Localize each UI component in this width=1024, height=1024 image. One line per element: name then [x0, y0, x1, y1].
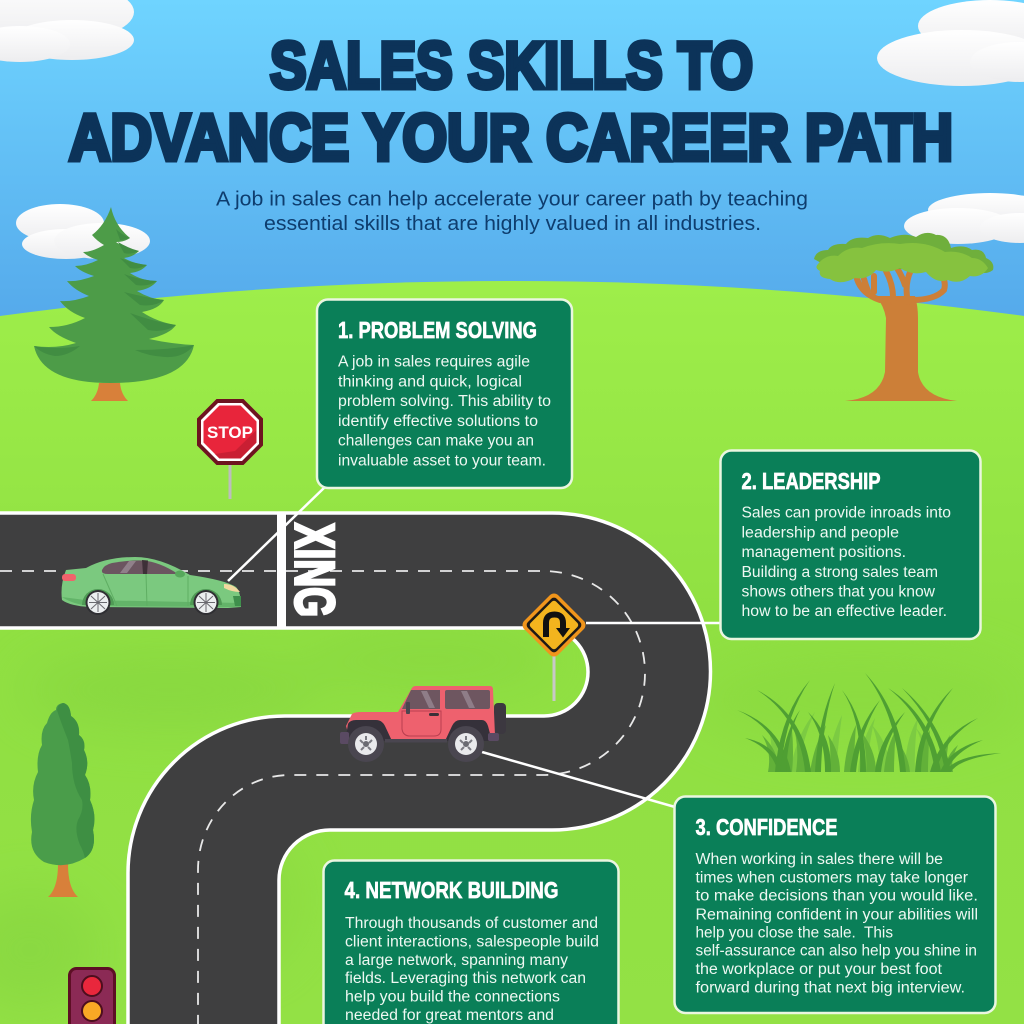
panel: 2. leadership — [720, 450, 980, 639]
XING road marking: XING — [284, 523, 346, 617]
icon: small cypress tree — [31, 703, 94, 897]
body text: Building a strong sales team — [742, 564, 938, 581]
body text: self-assurance can also help you shine in — [696, 943, 977, 960]
cloud: top right — [877, 0, 1024, 86]
body text: forward during that next big interview. — [696, 979, 965, 996]
panel: 4. network building — [324, 860, 618, 1024]
heading: 1. PROBLEM SOLVING — [338, 317, 537, 343]
body text: identify effective solutions to — [338, 413, 538, 430]
body text: help you close the sale. This — [696, 925, 893, 942]
body text: a large network, spanning many — [345, 952, 568, 969]
cloud: middle left — [16, 204, 150, 259]
subtitle — [216, 188, 808, 235]
road — [0, 513, 710, 1024]
heading: 2. LEADERSHIP — [742, 468, 880, 494]
body text: to make decisions than you would like. — [696, 888, 978, 905]
body text — [742, 505, 951, 620]
body text — [696, 851, 978, 996]
subtitle: A job in sales can help accelerate your career path by teaching — [216, 188, 808, 210]
body text: challenges can make you an — [338, 433, 534, 450]
body text: invaluable asset to your team. — [338, 452, 546, 470]
body text: needed for great mentors and — [345, 1007, 554, 1024]
title: SALES SKILLS TO — [270, 28, 753, 102]
body text: When working in sales there will be — [696, 851, 943, 868]
body text: Sales can provide inroads into — [742, 505, 951, 522]
panel: 3. confidence — [674, 796, 996, 1013]
icon: u-turn sign — [520, 591, 588, 701]
icon: pine tree — [34, 207, 194, 401]
icon: red jeep — [340, 686, 506, 762]
connector lines — [228, 486, 722, 809]
body text: how to be an effective leader. — [742, 603, 947, 620]
body text: leadership and people — [742, 525, 899, 542]
body text: thinking and quick, logical — [338, 374, 522, 390]
subtitle: essential skills that are highly valued in all industries. — [264, 213, 761, 235]
cloud: middle right — [904, 193, 1024, 244]
body text: client interactions, salespeople build — [345, 934, 599, 951]
body text: management positions. — [742, 544, 906, 561]
body text — [345, 915, 599, 1024]
green hill — [0, 281, 1024, 1024]
icon: stop sign: STOP — [207, 424, 253, 442]
heading: 3. CONFIDENCE — [696, 814, 838, 840]
body text: fields. Leveraging this network can — [345, 970, 586, 987]
body text — [338, 354, 551, 470]
icon: grass tuft — [737, 673, 1001, 772]
sky background — [0, 0, 1024, 330]
body text: A job in sales requires agile — [338, 354, 530, 371]
body text: shows others that you know — [742, 584, 936, 601]
body text: Through thousands of customer and — [345, 915, 598, 932]
icon: baobab tree — [814, 233, 993, 401]
heading: 4. NETWORK BUILDING — [344, 877, 558, 903]
icon: traffic light — [70, 968, 114, 1024]
crossing stripe — [277, 513, 286, 628]
cloud: top left — [0, 0, 134, 62]
body text: times when customers may take longer — [696, 869, 968, 886]
body text: help you build the connections — [345, 989, 560, 1006]
body text: Remaining confident in your abilities will — [696, 906, 978, 923]
icon: green car — [62, 557, 241, 615]
panel: 1. problem solving — [317, 300, 572, 488]
icon: stop sign — [197, 399, 263, 499]
body text: problem solving. This ability to — [338, 393, 551, 410]
title — [69, 28, 953, 174]
body text: the workplace or put your best foot — [696, 961, 943, 978]
